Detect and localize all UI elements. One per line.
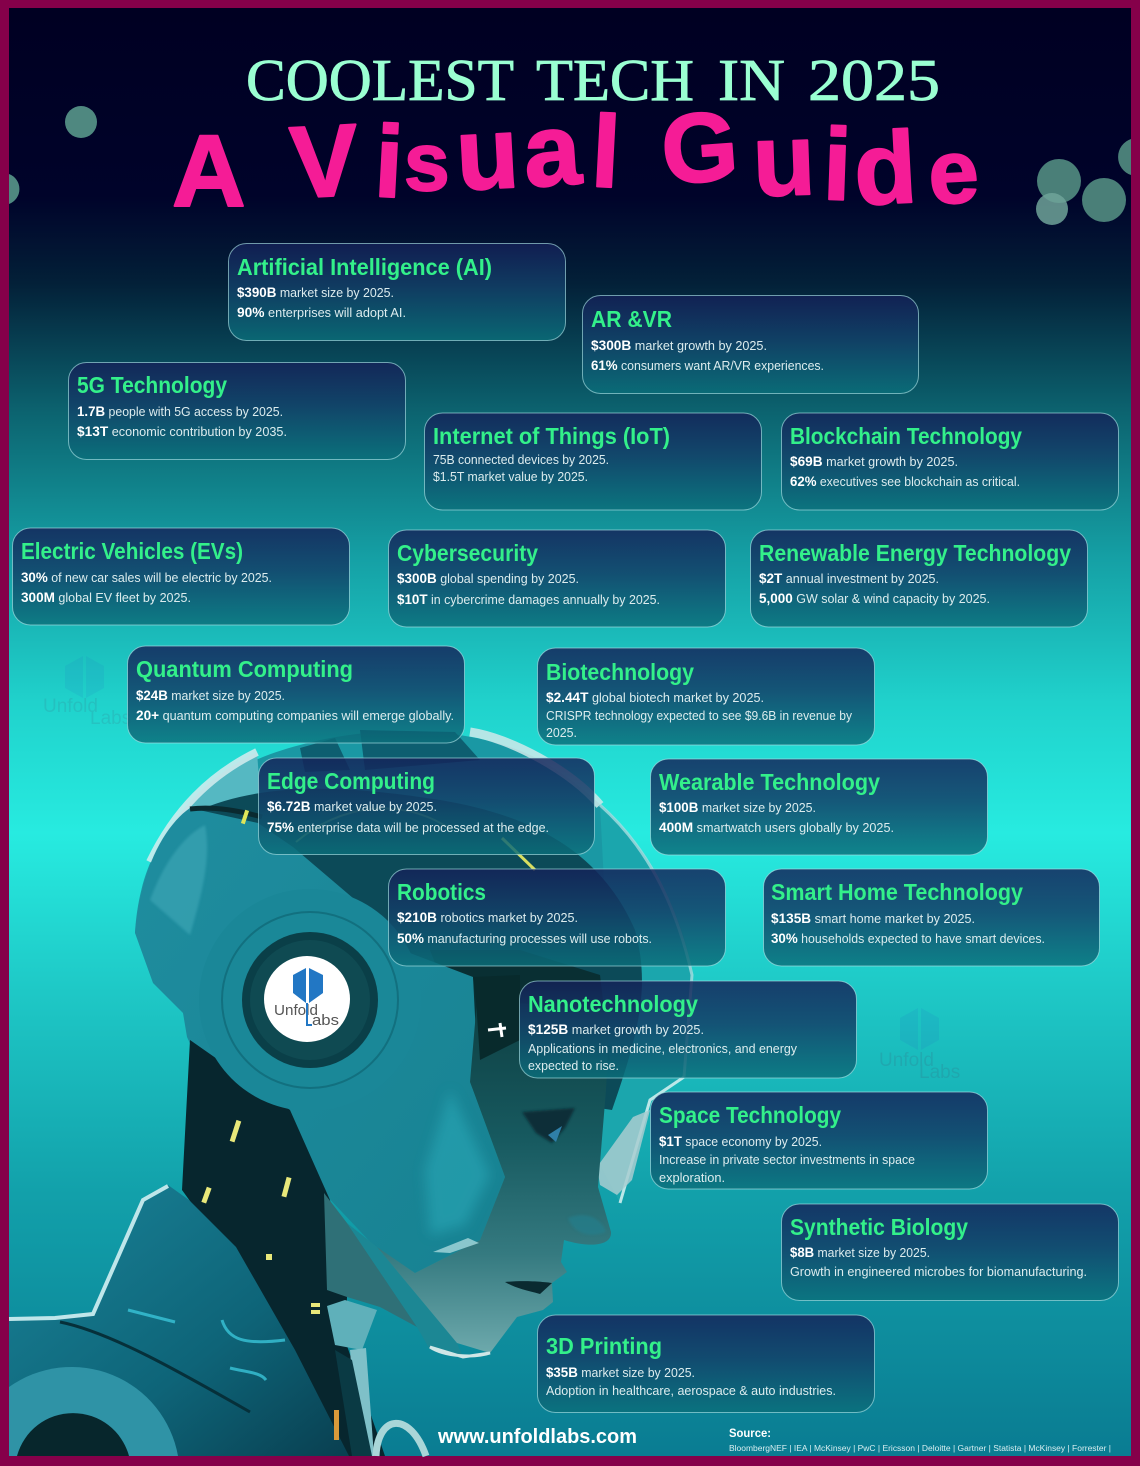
stats: 61% consumers want AR/VR experiences. bbox=[591, 358, 824, 373]
heading: AR &VR bbox=[591, 306, 672, 332]
panel: Renewable Energy Technology bbox=[750, 530, 1088, 627]
stats: Adoption in healthcare, aerospace & auto industries. bbox=[546, 1384, 836, 1398]
title: COOLEST bbox=[246, 47, 514, 113]
panel: AR and VR bbox=[582, 296, 918, 394]
dome right lighter glass bbox=[600, 805, 692, 1203]
panel: Blockchain Technology bbox=[782, 413, 1118, 510]
chin highlight bbox=[430, 1347, 490, 1357]
plate ridge bbox=[433, 1238, 479, 1253]
watermark logo right bbox=[879, 1008, 960, 1083]
stats: CRISPR technology expected to see $9.6B in revenue by bbox=[546, 709, 853, 723]
title: TECH bbox=[536, 47, 694, 113]
stats bbox=[21, 570, 272, 605]
stats bbox=[790, 454, 1020, 489]
heading: Nanotechnology bbox=[528, 991, 698, 1017]
stats: expected to rise. bbox=[528, 1059, 619, 1073]
stats: 50% manufacturing processes will use robots. bbox=[397, 931, 652, 946]
stats bbox=[528, 1022, 798, 1073]
heading: Quantum Computing bbox=[136, 656, 353, 682]
title: 2025 bbox=[808, 47, 940, 113]
cheek highlight bbox=[425, 1090, 490, 1235]
nose highlight bbox=[568, 1215, 606, 1235]
stats: 2025. bbox=[546, 726, 577, 740]
stats: $210B robotics market by 2025. bbox=[397, 910, 578, 925]
heading: Synthetic Biology bbox=[790, 1214, 968, 1240]
stats bbox=[433, 453, 609, 484]
stats: 30% of new car sales will be electric by 2025. bbox=[21, 570, 272, 585]
panel: Space Technology bbox=[650, 1092, 988, 1189]
panel: Electric Vehicles bbox=[12, 528, 350, 625]
stats: Increase in private sector investments in space bbox=[659, 1153, 915, 1167]
stats: $135B smart home market by 2025. bbox=[771, 911, 975, 926]
illustration: robot head and shoulders bbox=[9, 730, 692, 1456]
stats: $8B market size by 2025. bbox=[790, 1245, 930, 1260]
stats: 62% executives see blockchain as critical. bbox=[790, 474, 1020, 489]
visor mesh bbox=[597, 1110, 650, 1195]
stats bbox=[546, 690, 853, 740]
panel: Wearable Technology bbox=[650, 759, 988, 855]
stats: $13T economic contribution by 2035. bbox=[77, 424, 287, 439]
stats bbox=[136, 688, 454, 723]
stats: $1T space economy by 2025. bbox=[659, 1134, 822, 1149]
stats: $300B market growth by 2025. bbox=[591, 338, 767, 353]
stats: 75B connected devices by 2025. bbox=[433, 453, 609, 467]
dome top segments bbox=[300, 730, 480, 772]
watermark logo right: Unfold bbox=[879, 1050, 934, 1071]
stats bbox=[591, 338, 824, 373]
panel: Biotechnology bbox=[538, 648, 874, 745]
logo: Unfold Labs badge: Unfold bbox=[274, 1002, 318, 1019]
yellow trim arcs bbox=[296, 808, 452, 842]
dome upper-left sheen bbox=[150, 752, 262, 862]
logo: Unfold Labs badge bbox=[264, 956, 350, 1042]
stats: $24B market size by 2025. bbox=[136, 688, 285, 703]
website link: www.unfoldlabs.com bbox=[437, 1426, 637, 1448]
panel: Internet of Things bbox=[424, 413, 762, 510]
stats: $2T annual investment by 2025. bbox=[759, 571, 939, 586]
shoulder bbox=[9, 1185, 349, 1456]
mouth bbox=[505, 1281, 552, 1294]
dome rim bbox=[150, 752, 257, 862]
stats bbox=[546, 1365, 836, 1398]
heading: 3D Printing bbox=[546, 1333, 662, 1359]
stats: $10T in cybercrime damages annually by 2025. bbox=[397, 592, 660, 607]
panel: Quantum Computing bbox=[128, 646, 464, 743]
watermark logo left: Labs bbox=[90, 708, 131, 729]
stats: exploration. bbox=[659, 1171, 725, 1185]
watermark logo left bbox=[43, 656, 131, 729]
jaw strap bbox=[347, 1223, 463, 1357]
heading: Space Technology bbox=[659, 1102, 841, 1128]
stats: $6.72B market value by 2025. bbox=[267, 799, 437, 814]
panel: 3D Printing bbox=[538, 1315, 874, 1412]
stats: $69B market growth by 2025. bbox=[790, 454, 958, 469]
helmet shell bbox=[135, 808, 505, 1273]
stats bbox=[267, 799, 549, 835]
heading: Artificial Intelligence (AI) bbox=[237, 254, 492, 280]
panel: 5G Technology bbox=[68, 362, 406, 460]
stats: 90% enterprises will adopt AI. bbox=[237, 305, 406, 320]
stats bbox=[77, 404, 287, 439]
stats: 400M smartwatch users globally by 2025. bbox=[659, 820, 894, 835]
neck skin bbox=[324, 1193, 417, 1327]
stats: 1.7B people with 5G access by 2025. bbox=[77, 404, 283, 419]
heading: Robotics bbox=[397, 879, 486, 905]
stats: 30% households expected to have smart devices. bbox=[771, 931, 1045, 946]
stats: $1.5T market value by 2025. bbox=[433, 470, 588, 484]
panel: Synthetic Biology bbox=[782, 1204, 1118, 1300]
panel: Smart Home Technology bbox=[764, 869, 1100, 966]
stats: $390B market size by 2025. bbox=[237, 285, 394, 300]
heading: Cybersecurity bbox=[397, 540, 538, 566]
forehead dark patch bbox=[473, 975, 520, 1060]
stats bbox=[397, 571, 660, 607]
heading: Edge Computing bbox=[267, 768, 435, 794]
heading: Smart Home Technology bbox=[771, 879, 1023, 905]
heading: Renewable Energy Technology bbox=[759, 540, 1071, 566]
stats bbox=[659, 800, 894, 835]
stats bbox=[759, 571, 990, 606]
watermark logo left: Unfold bbox=[43, 696, 98, 717]
watermark logo right: Labs bbox=[919, 1062, 960, 1083]
panel: Nanotechnology bbox=[520, 981, 856, 1078]
stats: 75% enterprise data will be processed at the edge. bbox=[267, 820, 549, 835]
glass dome bbox=[135, 731, 691, 1203]
stats: Applications in medicine, electronics, and energy bbox=[528, 1042, 798, 1056]
eye bbox=[522, 1108, 575, 1143]
icon: white plane marking bbox=[488, 1023, 506, 1037]
stats: $2.44T global biotech market by 2025. bbox=[546, 690, 764, 705]
helmet dark stripe bbox=[190, 808, 262, 817]
panel: Edge Computing bbox=[258, 758, 594, 854]
heading: Internet of Things (IoT) bbox=[433, 423, 670, 449]
stats bbox=[659, 1134, 915, 1185]
face bbox=[377, 1000, 611, 1353]
logo: Unfold Labs badge: abs bbox=[312, 1012, 339, 1029]
panel: Artificial Intelligence bbox=[228, 244, 566, 340]
stats: 5,000 GW solar & wind capacity by 2025. bbox=[759, 591, 990, 606]
panel: Cybersecurity bbox=[388, 530, 726, 627]
shoulder joint bbox=[9, 1367, 178, 1456]
heading: Blockchain Technology bbox=[790, 423, 1022, 449]
stats bbox=[790, 1245, 1087, 1279]
subtitle: A Visual Guide: A Visual Guide bbox=[0, 90, 981, 228]
collar tubes bbox=[327, 1300, 377, 1350]
panel: Robotics bbox=[388, 869, 726, 966]
neck cables bbox=[182, 1040, 385, 1456]
ear disc bbox=[199, 889, 421, 1111]
stats bbox=[771, 911, 1045, 946]
stats: $125B market growth by 2025. bbox=[528, 1022, 704, 1037]
heading: Electric Vehicles (EVs) bbox=[21, 538, 243, 564]
title: IN bbox=[718, 47, 785, 113]
source list: BloombergNEF | IEA | McKinsey | PwC | Ericsson | Deloitte | Gartner | Statista | McKinsey | Forrester | bbox=[729, 1444, 1111, 1453]
stats: $35B market size by 2025. bbox=[546, 1365, 695, 1380]
heading: Wearable Technology bbox=[659, 769, 880, 795]
heading: 5G Technology bbox=[77, 372, 227, 398]
stats: 300M global EV fleet by 2025. bbox=[21, 590, 191, 605]
stats: $300B global spending by 2025. bbox=[397, 571, 579, 586]
stats: Growth in engineered microbes for biomanufacturing. bbox=[790, 1265, 1087, 1279]
heading: Biotechnology bbox=[546, 659, 694, 685]
stats bbox=[397, 910, 652, 946]
stats: $100B market size by 2025. bbox=[659, 800, 816, 815]
source list bbox=[729, 1426, 1111, 1453]
stats bbox=[237, 285, 406, 320]
stats: 20+ quantum computing companies will emerge globally. bbox=[136, 708, 454, 723]
decorative bubbles bbox=[9, 106, 1131, 225]
dark helmet interior bbox=[195, 789, 642, 1110]
source list: Source: bbox=[729, 1426, 771, 1440]
